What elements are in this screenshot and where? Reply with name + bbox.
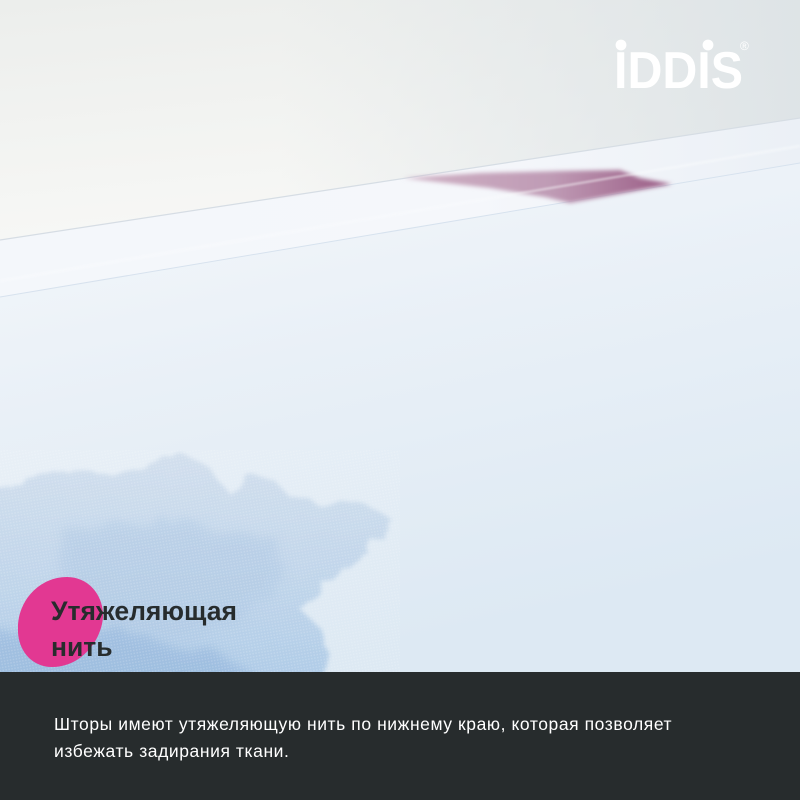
pink blob: [18, 577, 103, 667]
heading: Утяжеляющая: [51, 596, 237, 626]
watercolor stain: [0, 450, 400, 690]
description text: Шторы имеют утяжеляющую нить по нижнему краю, которая позволяет: [54, 714, 672, 734]
iddis logo: IDDIS: [614, 42, 743, 100]
iddis logo: ®: [740, 39, 749, 53]
description text: избежать задирания ткани.: [54, 741, 289, 761]
curtain hem band: [0, 118, 800, 297]
heading: [51, 596, 237, 662]
heading: нить: [51, 632, 113, 662]
plum print seen through hem: [403, 170, 672, 203]
hem bottom edge: [0, 163, 800, 297]
hem top edge: [0, 118, 800, 240]
curtain body: [0, 163, 800, 672]
description text: [54, 714, 672, 761]
wall background: [0, 0, 800, 300]
stitch line: [0, 146, 800, 281]
dark footer bar: [0, 672, 800, 800]
